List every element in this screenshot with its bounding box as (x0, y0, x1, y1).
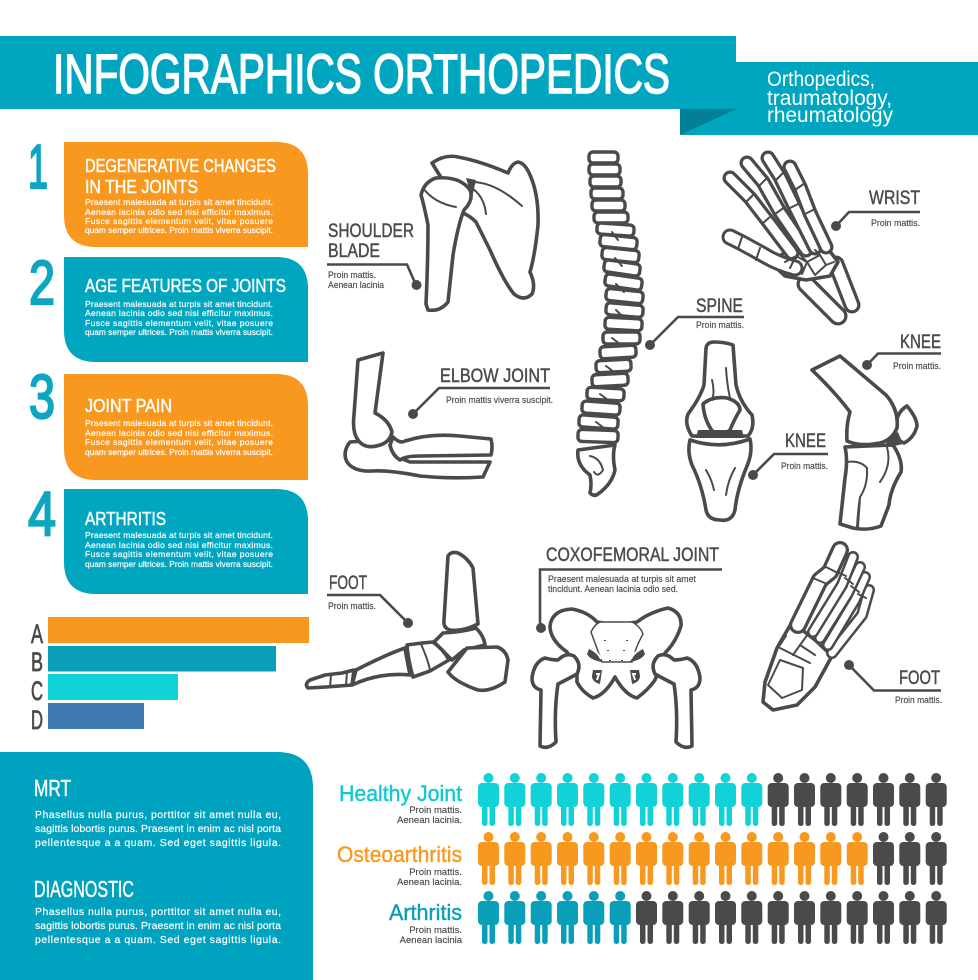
panel: MRT and diagnostic: sagittis lobortis purus. Praesent in enim ac nisl porta (35, 823, 281, 835)
pictogram row label: arthritis: Aenean lacinia (400, 935, 463, 946)
icon: foot side view (306, 552, 508, 690)
panel: card 3 joint pain (29, 363, 308, 480)
pictogram row: arthritis people (478, 891, 947, 944)
panel: card 2 age features: Fusce sagittis elementum velit, vitae posuere (85, 318, 273, 328)
icon: elbow joint bones (345, 353, 492, 478)
callout: spine (645, 295, 744, 350)
callout: shoulder blade: Aenean lacinia (328, 280, 384, 290)
callout: coxofemoral joint (536, 544, 722, 633)
icon: foot top view (763, 550, 869, 710)
icon: shoulder blade bones (421, 156, 538, 310)
panel: card 2 age features: AGE FEATURES OF JOINTS (85, 276, 286, 296)
pictogram row label: healthy joint: Aenean lacinia. (397, 815, 462, 826)
panel: card 2 age features: quam semper ultrices. Proin mattis viverra suscipit. (85, 327, 273, 337)
callout: spine: SPINE (696, 295, 743, 317)
panel: MRT and diagnostic: pellentesque a a quam. Sed eget sagittis ligula. (35, 837, 281, 849)
callout: coxofemoral joint: tincidunt. Aenean lacinia odio sed. (548, 584, 678, 594)
panel: card 2 age features: 2 (29, 249, 55, 318)
icon: wrist and hand bones (730, 158, 852, 316)
panel: MRT and diagnostic: DIAGNOSTIC (34, 876, 134, 902)
pictogram row label: osteoarthritis: Osteoarthritis (337, 842, 462, 867)
panel: card 4 arthritis: quam semper ultrices. Proin mattis viverra suscipit. (85, 559, 273, 569)
pictogram row label: arthritis (389, 900, 463, 946)
callout: shoulder blade (327, 220, 422, 290)
panel: card 3 joint pain: 3 (29, 363, 55, 432)
bar chart A B C D (31, 617, 309, 735)
title: INFOGRAPHICS ORTHOPEDICS (53, 42, 670, 105)
pictogram row label: osteoarthritis: Proin mattis. (409, 867, 462, 878)
panel: card 1 degenerative changes (28, 133, 308, 247)
callout: shoulder blade: BLADE (328, 240, 380, 262)
panel: MRT and diagnostic: pellentesque a a quam. Sed eget sagittis ligula. (35, 934, 281, 946)
panel: card 4 arthritis: ARTHRITIS (85, 509, 166, 529)
callout: foot right: FOOT (899, 667, 940, 689)
panel: card 1 degenerative changes: quam semper ultrices. Proin mattis viverra suscipit. (85, 225, 273, 235)
callout: elbow joint: Proin mattis viverra suscipit. (446, 395, 553, 405)
callout: knee center: Proin mattis. (781, 461, 828, 471)
bar chart A B C D: C (31, 676, 43, 706)
pictogram row: osteoarthritis people (478, 832, 947, 885)
callout: elbow joint: ELBOW JOINT (440, 365, 550, 387)
callout: shoulder blade: Proin mattis. (328, 270, 376, 280)
panel: card 2 age features: Aenean lacinia odio sed nisi efficitur maximus. (85, 308, 273, 318)
callout: foot right (844, 660, 942, 705)
icon: coxofemoral joint pelvis (532, 608, 700, 747)
panel: card 1 degenerative changes: DEGENERATIVE CHANGES (85, 156, 276, 176)
panel: card 1 degenerative changes: Aenean lacinia odio sed nisi efficitur maximus. (85, 207, 273, 217)
panel: card 4 arthritis (28, 480, 308, 594)
callout: knee right: Proin mattis. (893, 361, 941, 371)
callout: foot right: Proin mattis. (895, 695, 942, 705)
icon: knee front view (687, 342, 753, 520)
callout: coxofemoral joint: Praesent malesuada at turpis sit amet (548, 574, 697, 584)
pictogram row label: arthritis: Proin mattis. (409, 925, 462, 936)
panel: card 2 age features: Praesent malesuada at turpis sit amet tincidunt. (85, 299, 273, 309)
panel: card 1 degenerative changes: Praesent malesuada at turpis sit amet tincidunt. (85, 197, 273, 207)
panel: MRT and diagnostic: sagittis lobortis purus. Praesent in enim ac nisl porta (35, 920, 281, 932)
icon: spine (578, 152, 644, 495)
pictogram row label: arthritis: Arthritis (389, 900, 462, 925)
panel: card 4 arthritis: Praesent malesuada at turpis sit amet tincidunt. (85, 530, 273, 540)
panel: card 1 degenerative changes: Fusce sagittis elementum velit, vitae posuere (85, 216, 273, 226)
subtitle: traumatology, (767, 87, 892, 110)
pictogram row label: healthy joint (339, 781, 462, 826)
callout: knee center (748, 430, 828, 480)
subtitle (767, 68, 893, 127)
callout: foot left: Proin mattis. (328, 601, 376, 611)
callout: foot left: FOOT (329, 572, 367, 594)
panel: card 1 degenerative changes: IN THE JOINTS (85, 177, 198, 197)
callout: spine: Proin mattis. (696, 320, 744, 330)
bar chart A B C D: D (31, 705, 43, 735)
panel: MRT and diagnostic: MRT (34, 775, 71, 801)
callout: wrist (831, 187, 920, 231)
header banner (0, 36, 978, 135)
callout: wrist: WRIST (869, 187, 920, 209)
panel: card 2 age features (29, 249, 308, 362)
callout: knee right (862, 331, 941, 371)
callout: wrist: Proin mattis. (871, 218, 920, 228)
panel: card 4 arthritis: Fusce sagittis elementum velit, vitae posuere (85, 549, 273, 559)
panel: card 4 arthritis: 4 (28, 480, 56, 549)
panel: card 3 joint pain: Aenean lacinia odio sed nisi efficitur maximus. (85, 428, 273, 438)
callout: elbow joint (408, 365, 553, 419)
bar chart A B C D: A (31, 619, 43, 649)
pictogram row: healthy joint people (478, 773, 947, 826)
subtitle: Orthopedics, (767, 68, 875, 91)
pictogram row label: osteoarthritis (337, 842, 462, 888)
panel: card 3 joint pain: Fusce sagittis elementum velit, vitae posuere (85, 437, 273, 447)
panel: card 3 joint pain: Praesent malesuada at turpis sit amet tincidunt. (85, 418, 273, 428)
callout: shoulder blade: SHOULDER (328, 220, 414, 242)
panel: MRT and diagnostic: Phasellus nulla purus, porttitor sit amet nulla eu, (35, 809, 281, 821)
panel: card 3 joint pain: JOINT PAIN (85, 396, 172, 416)
panel: card 3 joint pain: quam semper ultrices. Proin mattis viverra suscipit. (85, 447, 273, 457)
pictogram row label: osteoarthritis: Aenean lacinia. (397, 877, 462, 888)
panel: MRT and diagnostic (0, 752, 313, 980)
callout: coxofemoral joint: COXOFEMORAL JOINT (546, 544, 719, 566)
callout: knee right: KNEE (900, 331, 941, 353)
pictogram row label: healthy joint: Healthy Joint (339, 781, 462, 806)
panel: card 4 arthritis: Aenean lacinia odio sed nisi efficitur maximus. (85, 540, 273, 550)
callout: knee center: KNEE (785, 430, 826, 452)
panel: MRT and diagnostic: Phasellus nulla purus, porttitor sit amet nulla eu, (35, 906, 281, 918)
icon: knee side view (812, 356, 917, 529)
panel: card 1 degenerative changes: 1 (28, 133, 48, 202)
subtitle: rheumatology (767, 104, 893, 127)
pictogram row label: healthy joint: Proin mattis. (409, 805, 462, 816)
bar chart A B C D: B (31, 647, 43, 677)
callout: foot left (327, 572, 413, 628)
